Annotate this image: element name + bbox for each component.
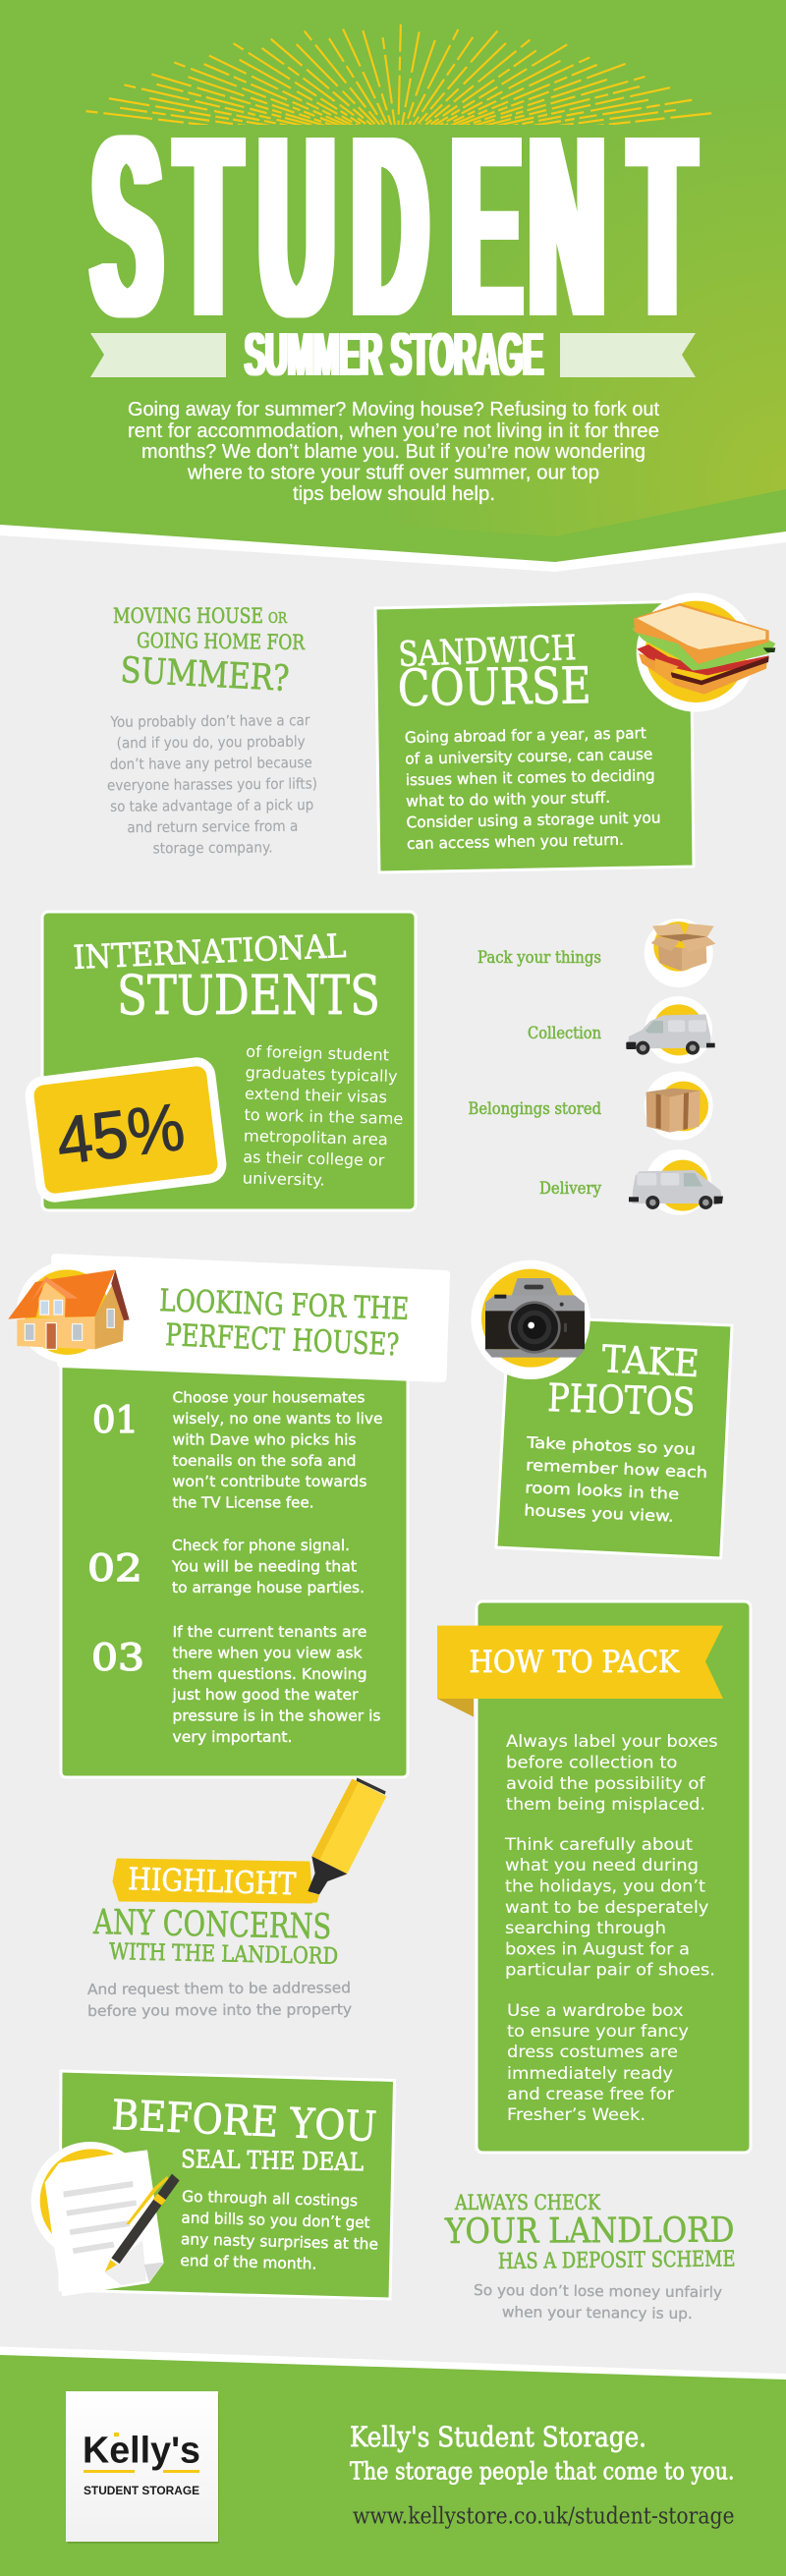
ribbon: right [560,333,696,377]
text block: moving house: and return service from a [127,817,298,836]
panel: international students [28,912,416,1210]
icon: camera [471,1260,590,1379]
panel: how to pack: want to be desperately [505,1898,708,1918]
panel: international students: STUDENTS [117,964,380,1027]
panel: take photos: PHOTOS [547,1376,696,1426]
panel: looking for the perfect house: LOOKING FOR THE [159,1283,410,1327]
text block: highlight: before you move into the property [87,2000,352,2020]
icon: document and pen [31,2142,180,2296]
panel: take photos: TAKE [601,1337,701,1385]
tip 03: very important. [173,1728,293,1746]
panel: how to pack: what you need during [505,1856,699,1876]
text block: always check: ALWAYS CHECK [454,2191,600,2214]
text block: moving house: GOING HOME FOR [137,629,306,654]
text block: highlight: ANY CONCERNS [92,1903,332,1947]
tip 02: Check for phone signal. [172,1537,350,1554]
footer panel [0,2346,786,2576]
panel: how to pack: to ensure your fancy [507,2022,689,2042]
footer text [350,2421,735,2530]
step: belongings stored: Belongings stored [468,1099,601,1119]
panel: sandwich course: SANDWICH [398,629,577,675]
panel: how to pack: Use a wardrobe box [507,2001,684,2021]
panel: how to pack: avoid the possibility of [506,1774,706,1794]
intro text: where to store your stuff over summer, our top [187,462,599,483]
logo [66,2391,219,2544]
panel: sandwich course: COURSE [397,657,591,718]
tip 03: 03 [91,1637,144,1679]
text block: always check: So you don’t lose money unfairly [474,2281,722,2301]
panel: sandwich course: Going abroad for a year, as part [405,724,646,747]
panel: before you seal the deal: Go through all costings [182,2188,358,2210]
step: collection [528,996,715,1064]
text block: moving house: You probably don’t have a car [109,711,310,731]
panel: before you seal the deal: end of the month. [180,2252,317,2273]
intro text: rent for accommodation, when you’re not living in it for three [128,420,659,442]
icon: collection van [626,996,715,1064]
panel: take photos: Take photos so you [526,1433,696,1459]
tip 01: wisely, no one wants to live [173,1410,383,1428]
ribbon: left [90,333,226,377]
panel: sandwich course: can access when you return. [407,831,624,853]
panel: international students: of foreign student [246,1042,389,1064]
tip 01: toenails on the sofa and [173,1452,356,1470]
tip 01: with Dave who picks his [173,1430,356,1448]
icon: highlighter [303,1777,386,1903]
tip 02: You will be needing that [171,1558,357,1576]
text block: always check: YOUR LANDLORD [444,2211,735,2252]
panel: sandwich course: of a university course, can cause [405,746,652,768]
tip 02: to arrange house parties. [172,1579,365,1596]
panel: international students: metropolitan area [244,1126,388,1148]
tip 03: pressure is in the shower is [173,1708,381,1725]
step: delivery: Delivery [539,1179,601,1199]
tip 01: the TV License fee. [173,1493,314,1511]
intro text: tips below should help. [293,483,495,505]
intro text: months? We don’t blame you. But if you’re now wondering [141,441,646,463]
panel: before you seal the deal [31,2071,394,2299]
tip 01: 01 [92,1399,139,1441]
panel: before you seal the deal: SEAL THE DEAL [181,2145,364,2176]
text block: always check [444,2191,736,2323]
panel: how to pack: Always label your boxes [506,1732,718,1752]
process list [468,919,723,1215]
panel: take photos: room looks in the [525,1479,680,1503]
panel: sandwich course: issues when it comes to deciding [406,766,655,789]
tip 03: If the current tenants are [173,1623,367,1641]
step: belongings stored [468,1072,713,1141]
text block: moving house: so take advantage of a pick up [110,796,313,815]
text block: moving house: OR [268,609,288,627]
panel: how to pack: immediately ready [507,2064,673,2084]
text block: highlight: And request them to be addressed [87,1979,351,1998]
footer text: The storage people that come to you. [350,2458,735,2486]
text block: moving house: everyone harasses you for lifts) [107,775,317,794]
logo: STUDENT STORAGE [84,2484,199,2497]
panel: how to pack: them being misplaced. [506,1795,705,1815]
panel: take photos: houses you view. [524,1501,674,1526]
panel: how to pack [437,1601,751,2153]
callout: 45% [28,1060,224,1200]
tip 03: there when you view ask [173,1645,363,1662]
step: pack your things [477,919,715,987]
text block: highlight [87,1777,386,2020]
panel: looking for the perfect house: PERFECT HOUSE? [165,1317,400,1363]
ribbon: how to pack [437,1626,723,1717]
panel: take photos: remember how each [526,1456,707,1482]
panel: international students: university. [243,1168,325,1190]
panel: how to pack: searching through [505,1919,666,1938]
panel: international students: as their college or [243,1148,385,1170]
text block: always check: when your tenancy is up. [502,2303,693,2323]
step: collection: Collection [528,1024,601,1043]
panel: international students: INTERNATIONAL [73,926,347,977]
logo: Kelly's [83,2431,200,2472]
tip 01: won’t contribute towards [173,1473,367,1490]
tip 03: just how good the water [171,1686,359,1704]
panel: how to pack: particular pair of shoes. [505,1961,715,1981]
tip 02: 02 [87,1547,142,1590]
icon: sandwich [632,592,775,712]
tip 03 [91,1623,381,1746]
panel: how to pack: Think carefully about [504,1835,693,1855]
tip 01: Choose your housemates [173,1389,365,1407]
ribbon: how to pack: HOW TO PACK [470,1645,680,1680]
panel: sandwich course [375,592,775,872]
panel: take photos [471,1260,732,1558]
panel: international students: extend their visas [245,1084,387,1106]
tip 02 [87,1537,365,1596]
title: STUDENT: STUDENT [92,84,694,370]
panel: international students: graduates typically [245,1063,398,1086]
intro text [128,399,659,505]
text block: highlight: HIGHLIGHT [128,1862,297,1902]
panel: how to pack: the holidays, you don’t [505,1877,705,1897]
sunburst rays [85,24,711,125]
icon: house [8,1261,130,1363]
footer text: www.kellystore.co.uk/student-storage [353,2504,735,2530]
header panel [0,0,786,572]
icon: delivery van [629,1149,723,1215]
step: pack your things: Pack your things [477,948,601,968]
text block: always check: HAS A DEPOSIT SCHEME [498,2247,736,2274]
panel: before you seal the deal: any nasty surprises at the [181,2230,378,2254]
panel: sandwich course: what to do with your stuff. [406,789,610,811]
text block: moving house: don’t have any petrol because [110,754,312,773]
panel: how to pack: Fresher’s Week. [507,2105,646,2125]
panel: how to pack: dress costumes are [507,2043,678,2062]
banner [55,1258,446,1378]
panel: sandwich course: Consider using a storage unit you [406,809,661,831]
intro text: Going away for summer? Moving house? Refusing to fork out [128,399,659,420]
text block: highlight: WITH THE LANDLORD [109,1939,338,1970]
highlight stroke [114,1860,311,1902]
panel: how to pack: and crease free for [507,2085,674,2104]
panel: how to pack: before collection to [506,1753,678,1772]
tip 03: them questions. Knowing [173,1665,367,1683]
text block: moving house: SUMMER? [120,650,290,700]
panel: looking for the perfect house [8,1258,446,1777]
panel: before you seal the deal: and bills so you don’t get [181,2209,370,2232]
panel: international students: to work in the same [244,1105,404,1128]
panel: how to pack: boxes in August for a [505,1939,690,1959]
text block: moving house: (and if you do, you probably [117,733,306,752]
footer text: Kelly's Student Storage. [350,2421,646,2453]
text block: moving house: storage company. [152,838,273,858]
step: delivery [539,1149,723,1215]
text block: moving house: MOVING HOUSE [113,604,263,628]
icon: open box [645,919,715,987]
callout: 45%: 45% [53,1090,189,1179]
panel: before you seal the deal: BEFORE YOU [111,2091,377,2151]
text block: moving house [106,604,318,858]
icon: taped box [645,1072,713,1141]
tip 01 [92,1389,383,1511]
